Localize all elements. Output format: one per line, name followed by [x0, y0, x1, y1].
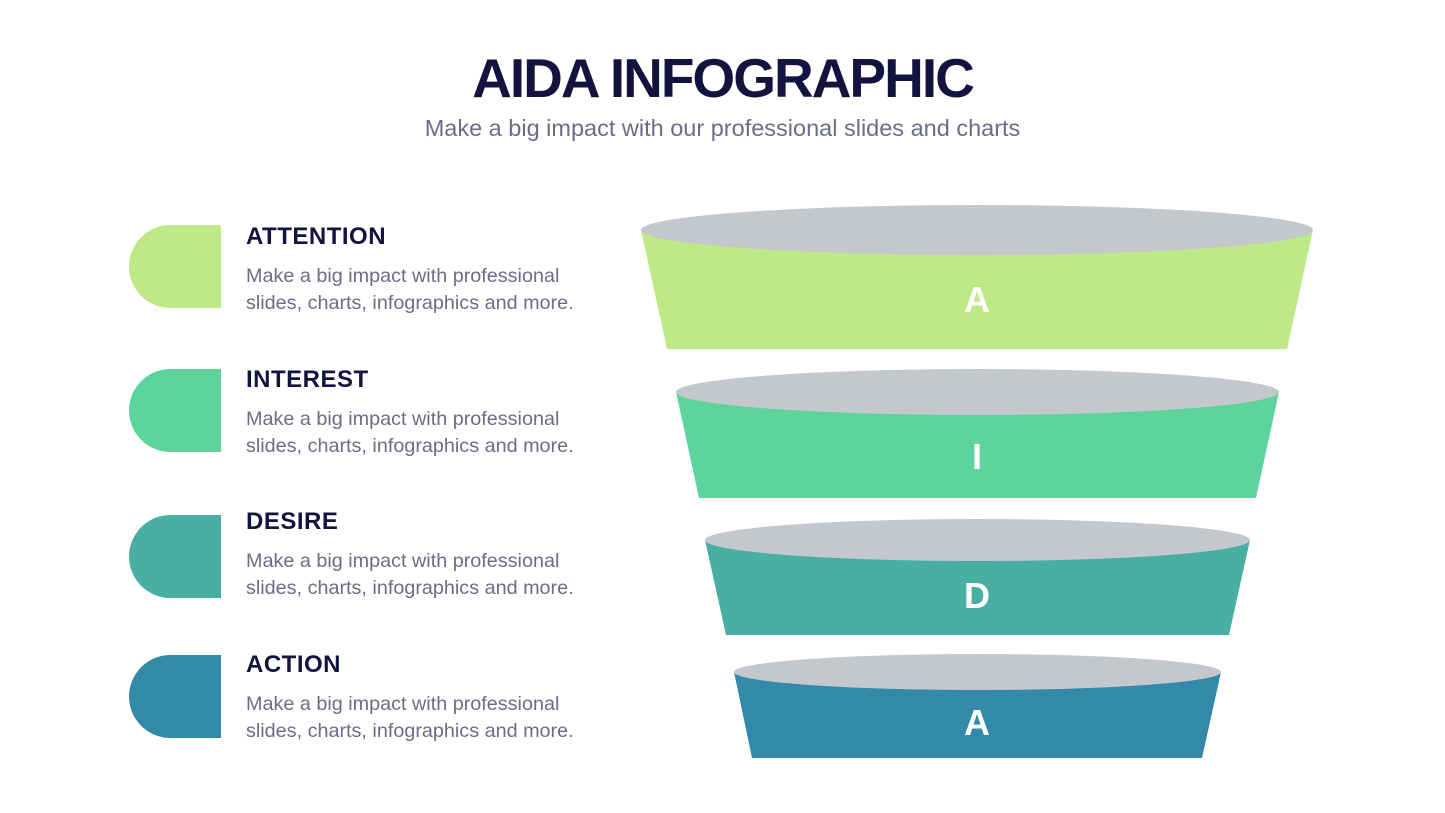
text: desire: DESIRE	[246, 508, 338, 535]
text: interest: INTEREST	[246, 366, 369, 393]
tab: desire	[129, 515, 221, 598]
tier 1: attention	[641, 205, 1313, 349]
tier 3: desire: D	[964, 575, 990, 616]
tier 2: interest: I	[972, 436, 982, 477]
text: action: ACTION	[246, 651, 341, 678]
text: interest	[246, 366, 574, 457]
tab: attention	[129, 225, 221, 308]
text: attention	[246, 223, 574, 314]
text: interest: Make a big impact with professional	[246, 408, 559, 430]
tier 2: interest	[676, 369, 1279, 498]
subtitle: Make a big impact with our professional slides and charts	[425, 115, 1020, 141]
text: desire	[246, 508, 574, 599]
tab: interest	[129, 369, 221, 452]
text: desire: Make a big impact with professional	[246, 550, 559, 572]
text: action: Make a big impact with professional	[246, 693, 559, 715]
tier 4: action: A	[964, 702, 990, 743]
text: action	[246, 651, 574, 742]
text: action: slides, charts, infographics and more.	[246, 720, 574, 742]
title: AIDA INFOGRAPHIC	[472, 47, 973, 109]
text: attention: slides, charts, infographics and more.	[246, 292, 574, 314]
text: attention: ATTENTION	[246, 223, 386, 250]
text: interest: slides, charts, infographics and more.	[246, 435, 574, 457]
tier 4: action	[734, 654, 1221, 758]
text: attention: Make a big impact with professional	[246, 265, 559, 287]
tab: action	[129, 655, 221, 738]
tier 3: desire	[705, 519, 1250, 635]
text: desire: slides, charts, infographics and more.	[246, 577, 574, 599]
tier 1: attention: A	[964, 279, 990, 320]
